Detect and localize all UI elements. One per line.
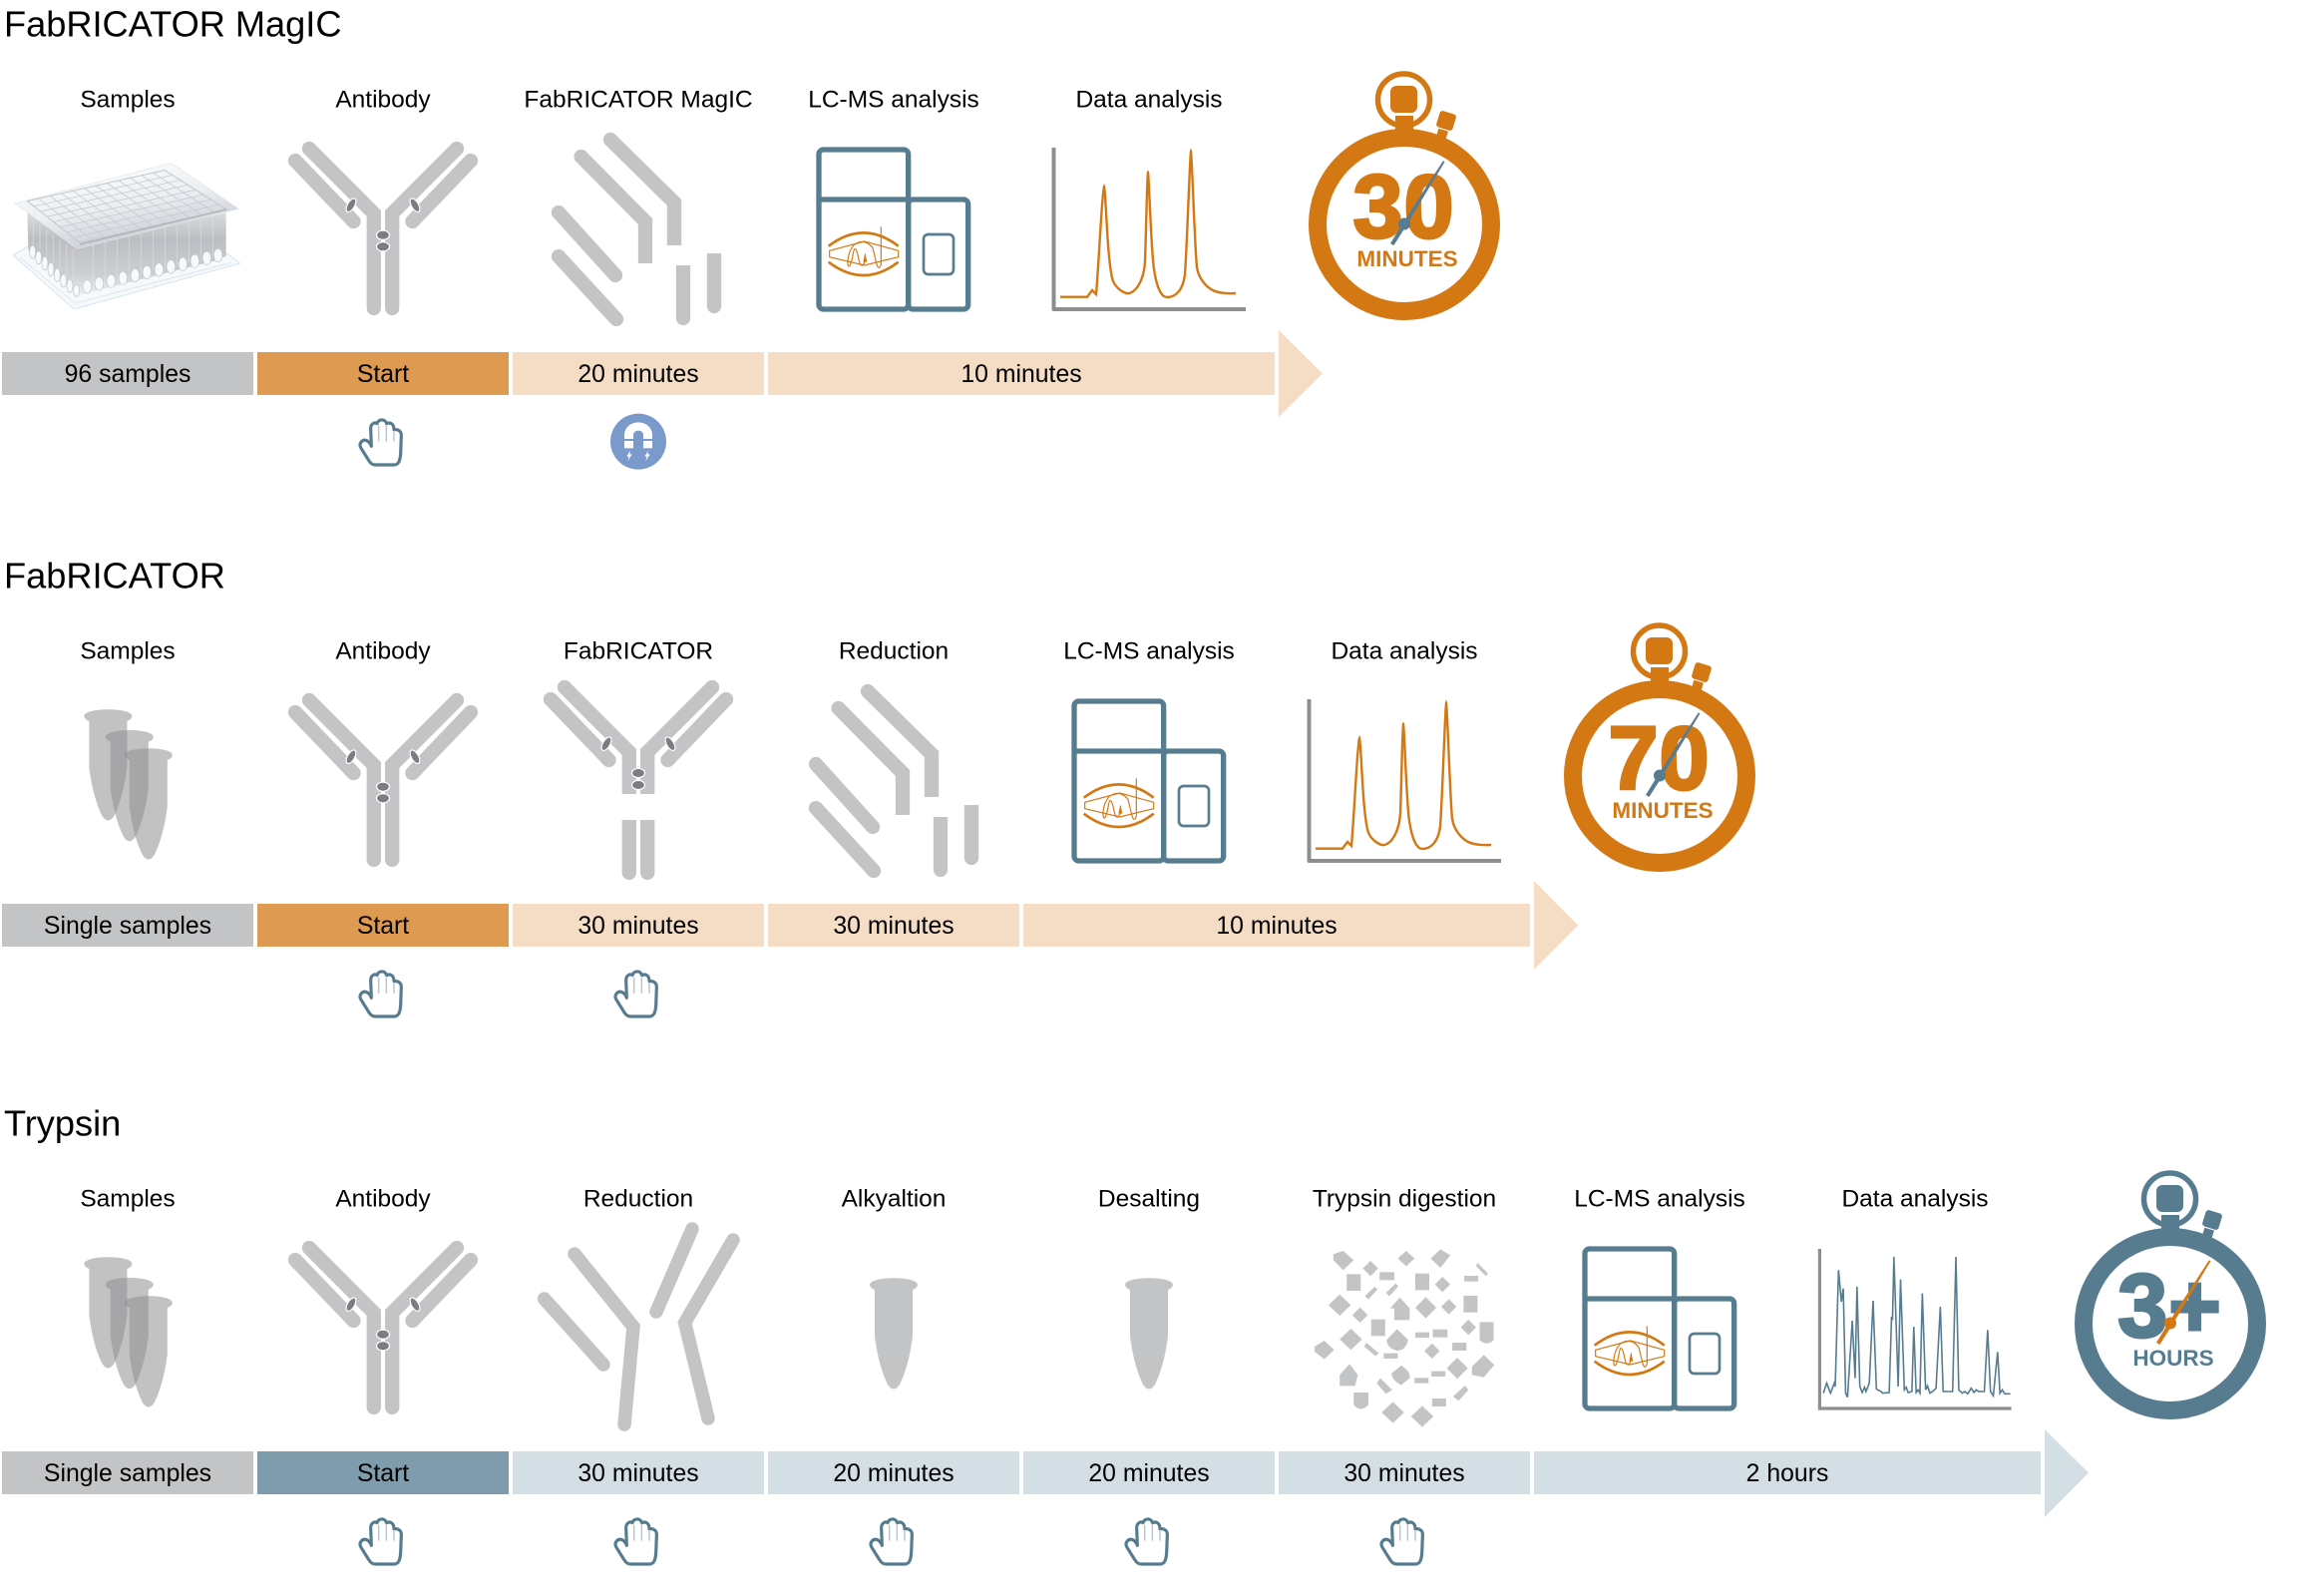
panel: FabRICATOR workflow [2,556,1746,1016]
icon: LC-MS instrument [1585,1249,1734,1408]
timeline bar: 96 samples [65,361,191,388]
step labels row: Antibody [335,86,431,113]
timeline bar: Single samples [44,913,211,940]
timeline bar: 30 minutes [1343,1460,1465,1487]
icon: reduced antibody fragments [816,684,978,877]
stopwatch: 70 minutes [1573,625,1746,863]
step labels row: Alkyaltion [842,1185,946,1212]
chart: data analysis peaks [1053,148,1246,309]
timeline bar: 10 minutes [1216,913,1338,940]
step labels row: FabRICATOR MagIC [524,86,753,113]
icon: antibody [295,149,471,308]
timeline bar: Start [357,1460,409,1487]
chart: data analysis peaks [1309,699,1501,861]
stopwatch: 3+ hours: HOURS [2132,1346,2214,1371]
timeline bar [2,1429,2089,1517]
timeline bar: 20 minutes [833,1460,955,1487]
stopwatch: 3+ hours: 3+ [2117,1257,2222,1357]
step labels row: Samples [80,86,176,113]
step labels row: Data analysis [1331,637,1478,664]
heading: Trypsin: Trypsin [4,1103,121,1144]
step labels row: Data analysis [1075,86,1223,113]
step labels row [80,86,1223,113]
step labels row: Reduction [839,637,949,664]
icon: FabRICATOR MagIC fragments [559,133,721,325]
stopwatch: 30 minutes: 30 [1352,158,1455,257]
step labels row: Reduction [583,1185,693,1212]
panel: FabRICATOR MagIC workflow [2,4,1491,470]
icon: hand [360,420,401,465]
heading: FabRICATOR: FabRICATOR [4,556,225,597]
timeline bar: 10 minutes [960,361,1082,388]
timeline bar: Single samples [44,1460,211,1487]
stopwatch: 3+ hours [2084,1173,2257,1410]
icon: FabRICATOR cleaved antibody [551,680,726,880]
step labels row: Samples [80,637,176,664]
icon: reduced antibody chains [545,1229,733,1424]
icons: manual steps [360,972,656,1016]
timeline bar [2,881,1578,970]
step labels row: Antibody [335,1185,431,1212]
stopwatch: 30 minutes [1318,74,1491,311]
stopwatch: 70 minutes: MINUTES [1612,798,1714,823]
step labels row: LC-MS analysis [1574,1185,1745,1212]
chart: complex data analysis trace [1819,1249,2012,1408]
timeline bar: 30 minutes [577,913,699,940]
step labels row [80,637,1478,664]
step labels row: FabRICATOR [564,637,713,664]
timeline bar: 30 minutes [833,913,955,940]
icon: sample tubes [84,1257,173,1406]
step labels row: LC-MS analysis [1063,637,1235,664]
icon: 96-well plate [13,163,240,309]
step labels row: Samples [80,1185,176,1212]
timeline bar: Start [357,361,409,388]
timeline bar: 2 hours [1746,1460,1828,1487]
icons: manual steps [360,1519,1422,1564]
icon: LC-MS instrument [1074,701,1224,861]
icon: sample tubes [84,709,173,860]
step labels row: Desalting [1098,1185,1200,1212]
icon: antibody [295,700,471,860]
timeline bar: 20 minutes [577,361,699,388]
icon: LC-MS instrument [819,150,968,309]
step labels row: Trypsin digestion [1313,1185,1496,1212]
panel: Trypsin workflow [2,1103,2257,1564]
timeline bar [2,330,1323,417]
icon: alkylation tube [870,1278,918,1389]
icon: trypsin peptide fragments [1315,1249,1494,1427]
step labels row: LC-MS analysis [808,86,979,113]
timeline bar: 30 minutes [577,1460,699,1487]
icon: antibody [295,1248,471,1407]
icon: desalting tube [1125,1278,1173,1389]
step labels row [80,1185,1989,1212]
timeline bar: Start [357,913,409,940]
step labels row: Antibody [335,637,431,664]
stopwatch: 70 minutes: 70 [1608,709,1711,809]
stopwatch: 30 minutes: MINUTES [1356,246,1458,271]
icon: magnet [610,414,666,470]
timeline bar: 20 minutes [1088,1460,1210,1487]
step labels row: Data analysis [1841,1185,1989,1212]
heading: FabRICATOR MagIC: FabRICATOR MagIC [4,4,341,45]
